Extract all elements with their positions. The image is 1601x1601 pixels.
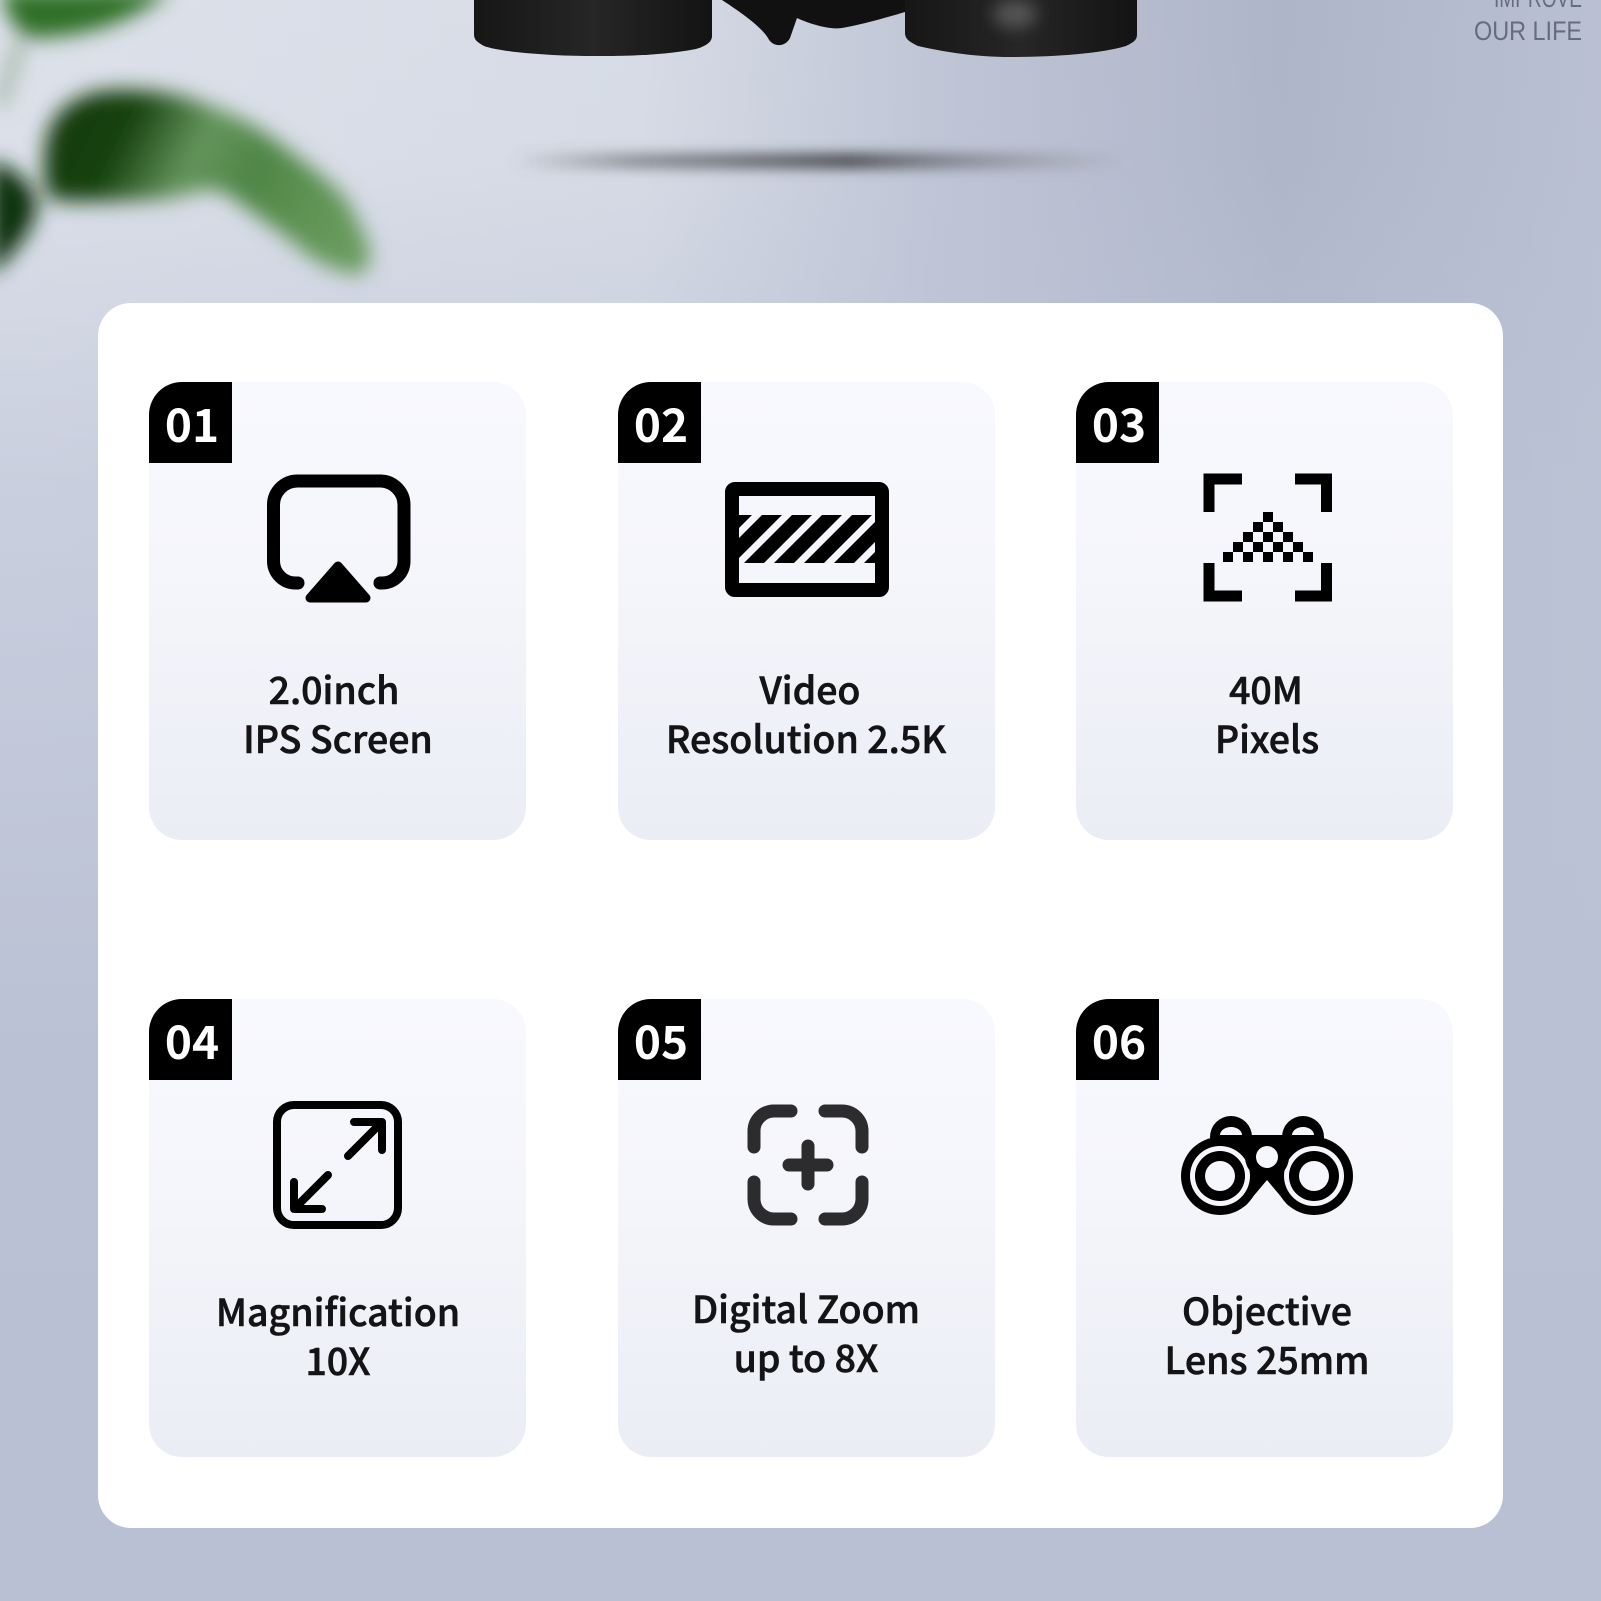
binoculars product bottom xyxy=(474,0,1137,57)
icon: striped frame xyxy=(725,482,889,597)
card 04: magnification xyxy=(149,999,526,1457)
label: IPS Screen xyxy=(243,709,433,764)
card 06: objective lens xyxy=(1076,999,1453,1457)
label xyxy=(666,660,946,764)
badge 05: 05 xyxy=(634,1007,688,1073)
card 01: IPS screen xyxy=(149,382,526,840)
badge 01: 01 xyxy=(165,390,219,456)
label: 10X xyxy=(305,1331,371,1386)
icon: zoom frame plus xyxy=(754,1111,862,1219)
label: Pixels xyxy=(1215,709,1319,764)
badge 03: 03 xyxy=(1092,390,1146,456)
label xyxy=(216,1282,460,1386)
label xyxy=(692,1279,920,1383)
badge 01 xyxy=(149,382,232,463)
icon: airplay screen xyxy=(274,481,404,598)
badge 05 xyxy=(618,999,701,1080)
label: 40M xyxy=(1229,660,1303,715)
card 05: digital zoom xyxy=(618,999,995,1457)
card 02: video resolution xyxy=(618,382,995,840)
badge 02: 02 xyxy=(634,390,688,456)
panel: white features panel xyxy=(98,303,1503,1528)
label: Digital Zoom xyxy=(692,1279,920,1334)
label: Resolution 2.5K xyxy=(666,709,946,764)
badge 03 xyxy=(1076,382,1159,463)
label: Lens 25mm xyxy=(1165,1330,1369,1385)
binoculars shadow xyxy=(510,153,1130,169)
tagline text xyxy=(1474,0,1582,46)
card 03: pixels xyxy=(1076,382,1453,840)
badge 04 xyxy=(149,999,232,1080)
label: Video xyxy=(758,660,860,715)
label xyxy=(1165,1281,1369,1385)
blurred plant leaves xyxy=(0,0,370,275)
badge 06 xyxy=(1076,999,1159,1080)
badge 06: 06 xyxy=(1092,1007,1146,1073)
label: up to 8X xyxy=(734,1328,878,1383)
label: Magnification xyxy=(216,1282,460,1337)
icon: binoculars xyxy=(1181,1116,1353,1215)
label xyxy=(1215,660,1319,764)
label xyxy=(243,660,433,764)
label: 2.0inch xyxy=(269,660,399,715)
label: Objective xyxy=(1182,1281,1352,1336)
icon: pixel frame xyxy=(1209,479,1326,596)
badge 02 xyxy=(618,382,701,463)
icon: expand arrows xyxy=(277,1105,398,1225)
tagline text: OUR LIFE xyxy=(1474,16,1582,46)
badge 04: 04 xyxy=(165,1007,219,1073)
